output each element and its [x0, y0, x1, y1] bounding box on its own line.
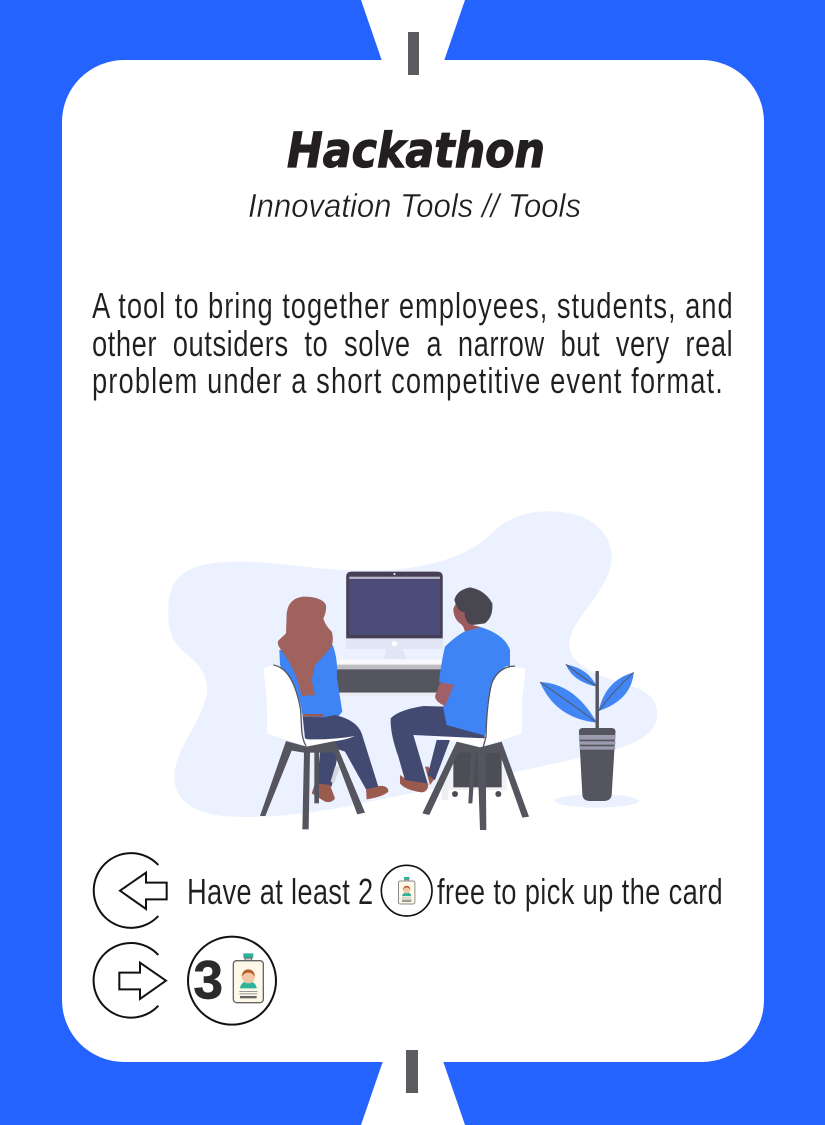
description text: other outsiders to solve a narrow but very real: [92, 323, 733, 364]
plant: [540, 664, 634, 801]
description text: problem under a short competitive event format.: [92, 360, 723, 401]
icon: small ID badge: [381, 865, 432, 916]
icon: large ID badge with count: 3: [193, 951, 223, 1010]
title: Hackathon: [287, 123, 545, 179]
description text: A tool to bring together employees, students, and: [92, 285, 733, 326]
icon row group: [94, 853, 432, 1025]
requirement text: have at least 2: Have at least 2: [187, 871, 373, 912]
desk: [335, 659, 445, 696]
monitor: [346, 572, 443, 662]
top connector bar: [408, 32, 419, 75]
requirement text: free to pick up the card: free to pick up the card: [437, 871, 723, 912]
icon: large ID badge with count: [188, 937, 276, 1025]
background blob: [168, 511, 657, 817]
bottom connector bar: [406, 1050, 418, 1093]
description text: [92, 285, 733, 401]
icon: input arrow: [94, 853, 167, 928]
scene backdrop, monitor, desk, plant: [168, 511, 657, 817]
person and chair: woman: [260, 597, 388, 829]
person and chair: man: [391, 587, 529, 830]
illustration: two people at a computer: [168, 511, 657, 830]
icon: output arrow: [94, 943, 166, 1018]
plant shadow: [555, 794, 639, 808]
subtitle: Innovation Tools // Tools: [248, 187, 581, 224]
